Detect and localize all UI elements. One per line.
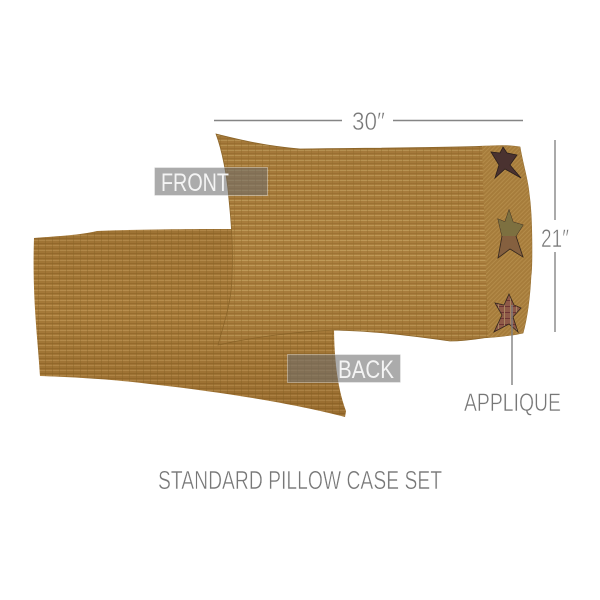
caption: STANDARD PILLOW CASE SET: [158, 465, 442, 495]
label: back: BACK: [338, 356, 394, 384]
icon: red plaid star applique: [494, 294, 521, 332]
label: front: FRONT: [161, 169, 229, 197]
back pillow case: [34, 229, 346, 417]
cuff with diagonal weave: [482, 146, 532, 338]
icon: dark star applique: [491, 147, 521, 178]
label: back: [288, 354, 400, 384]
pillow body: [216, 134, 532, 345]
dimension: width 30 inches: 30″: [352, 108, 385, 136]
dimension: height 21 inches: 21″: [541, 225, 569, 253]
pillow shading: [216, 134, 532, 345]
front pillow case: [216, 134, 532, 345]
applique callout: APPLIQUE: [464, 389, 561, 417]
icon: olive plaid star applique: [498, 210, 523, 258]
applique callout: [464, 305, 561, 417]
